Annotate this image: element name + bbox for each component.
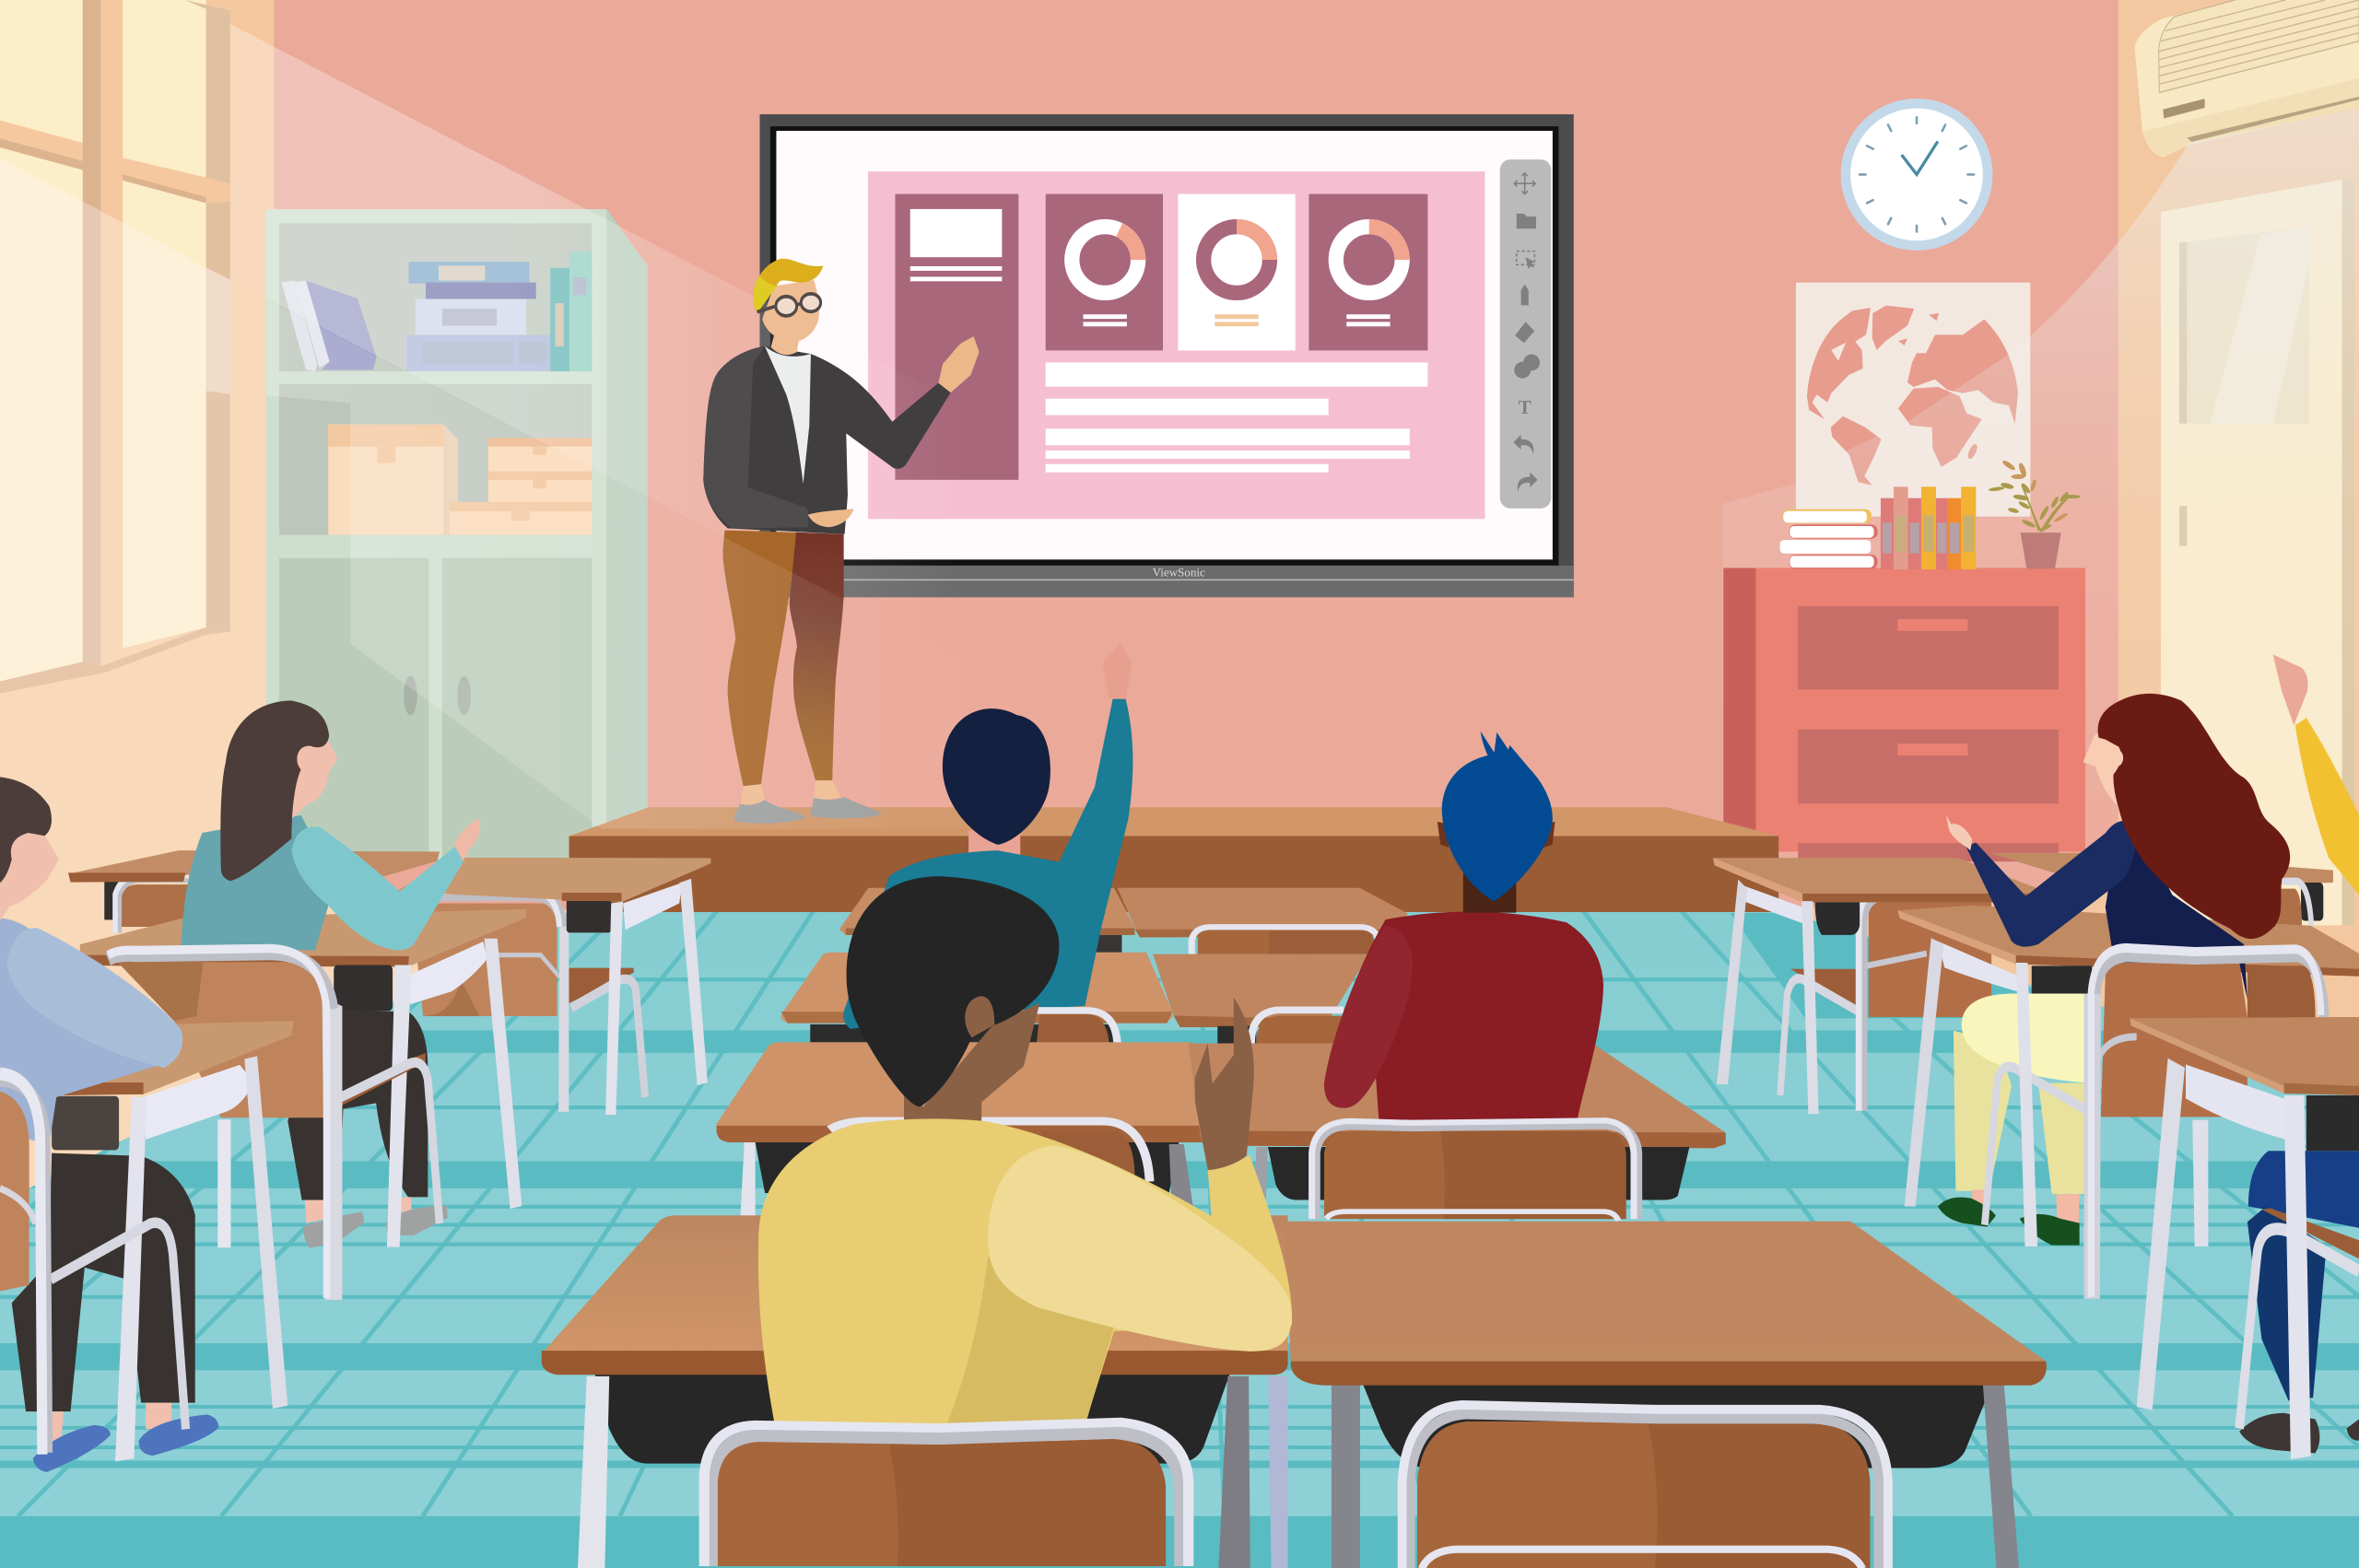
lower legs — [2248, 1206, 2327, 1400]
girl's desk — [80, 909, 526, 1011]
chair — [1780, 889, 1991, 1111]
map poster — [1796, 283, 2030, 517]
front right chair — [1402, 1405, 1888, 1568]
far left desk and chair — [68, 850, 440, 932]
arm — [1324, 925, 1413, 1108]
arm — [2295, 718, 2359, 895]
back wall — [0, 0, 2359, 963]
raised forearm sleeve — [1208, 1155, 1292, 1326]
hair — [1442, 731, 1553, 901]
lower legs — [1954, 1031, 2088, 1194]
desk top — [1713, 858, 2038, 902]
neck — [1463, 873, 1516, 913]
hand — [453, 818, 480, 861]
raised hand — [1195, 998, 1254, 1170]
second left desk and chair — [395, 858, 710, 1115]
socks and shoes — [303, 1197, 448, 1248]
hair — [220, 701, 329, 881]
girl's desk legs and chair — [108, 939, 522, 1300]
feet and shoes — [734, 780, 882, 824]
jacket — [703, 346, 951, 534]
student: blue hair, red shirt — [1324, 731, 1603, 1124]
front left desk — [52, 1021, 294, 1150]
shoes — [2239, 1413, 2359, 1453]
front left chair — [704, 1422, 1189, 1566]
cupboard — [265, 209, 648, 860]
arm — [988, 1146, 1292, 1352]
far right back desk — [1989, 853, 2333, 932]
glasses — [757, 294, 821, 316]
arm — [7, 928, 182, 1068]
right middle desk front leg and chair — [1985, 948, 2324, 1299]
student: raised hand in teal — [843, 643, 1133, 1029]
brand label: ViewSonic — [1153, 565, 1205, 579]
torso — [758, 1118, 1292, 1424]
hand — [1102, 643, 1133, 699]
platform — [569, 807, 1778, 912]
interactive display — [759, 114, 1574, 597]
donut charts — [1072, 227, 1402, 293]
thigh — [1962, 993, 2092, 1083]
shelf boxes — [328, 425, 592, 535]
front left desk legs and chair — [0, 1056, 288, 1461]
arm — [291, 826, 464, 951]
head — [847, 876, 1059, 1106]
air conditioner — [2135, 0, 2359, 158]
lower light wedge — [266, 299, 1053, 829]
back right chair and desk — [1713, 858, 2038, 1114]
air conditioner light cone — [1722, 109, 2359, 993]
torso and arm — [843, 699, 1133, 1029]
right middle desk — [1897, 906, 2359, 1206]
wall clock — [1841, 99, 1992, 251]
toolbar — [1500, 159, 1551, 509]
sleeve — [703, 346, 808, 529]
trousers — [288, 1009, 428, 1200]
socks and shoes — [1938, 1189, 2080, 1246]
neck — [904, 1003, 1039, 1124]
student: yellow sweater in front — [758, 876, 1292, 1426]
right middle chair — [1312, 1120, 1637, 1221]
ear — [965, 996, 994, 1037]
right wall with door — [1778, 0, 2359, 1083]
student: girl in teal — [181, 701, 480, 1248]
student: far right — [2239, 654, 2359, 1453]
left wall with window — [0, 0, 571, 1203]
floor tiles — [0, 910, 2359, 1568]
cabinet and objects on top — [1723, 459, 2085, 861]
neck — [968, 830, 1020, 856]
arm — [1966, 821, 2135, 947]
neck and face — [762, 280, 819, 355]
hair — [2098, 694, 2290, 939]
hand — [1946, 814, 1972, 850]
student: woman with red hair — [1938, 694, 2290, 1246]
torso — [1324, 911, 1603, 1124]
text tool icon: T — [1519, 396, 1532, 418]
face — [2083, 720, 2126, 812]
trousers — [12, 1153, 195, 1411]
shelf books — [281, 252, 592, 371]
low chair — [2239, 1209, 2359, 1429]
hands — [938, 336, 980, 392]
teacher — [703, 259, 980, 824]
face — [292, 742, 337, 818]
face — [0, 815, 59, 921]
floor — [0, 910, 2359, 1568]
torso — [0, 918, 159, 1144]
torso — [2106, 827, 2248, 1000]
slide panel — [868, 171, 1485, 519]
upper middle desks — [781, 953, 1369, 1044]
trousers — [723, 531, 844, 786]
hair — [753, 259, 823, 311]
thigh — [2248, 1151, 2359, 1228]
books and plant — [1780, 459, 2081, 569]
middle desks — [717, 1042, 1726, 1219]
socks and shoes — [33, 1403, 218, 1472]
hand — [2273, 654, 2308, 725]
desk — [2306, 1095, 2359, 1151]
front desks — [542, 1215, 2047, 1568]
shirt — [765, 346, 811, 484]
far centre desks — [839, 888, 1408, 954]
upper middle chairs — [1037, 1010, 1344, 1044]
door — [2161, 180, 2354, 925]
window light beam on wall — [230, 24, 1023, 670]
torso — [181, 815, 329, 951]
head — [943, 708, 1050, 845]
student: boy in blue — [0, 777, 218, 1472]
front right desk and chair — [2130, 1017, 2359, 1459]
hair — [0, 777, 52, 883]
ears — [1438, 822, 1555, 848]
